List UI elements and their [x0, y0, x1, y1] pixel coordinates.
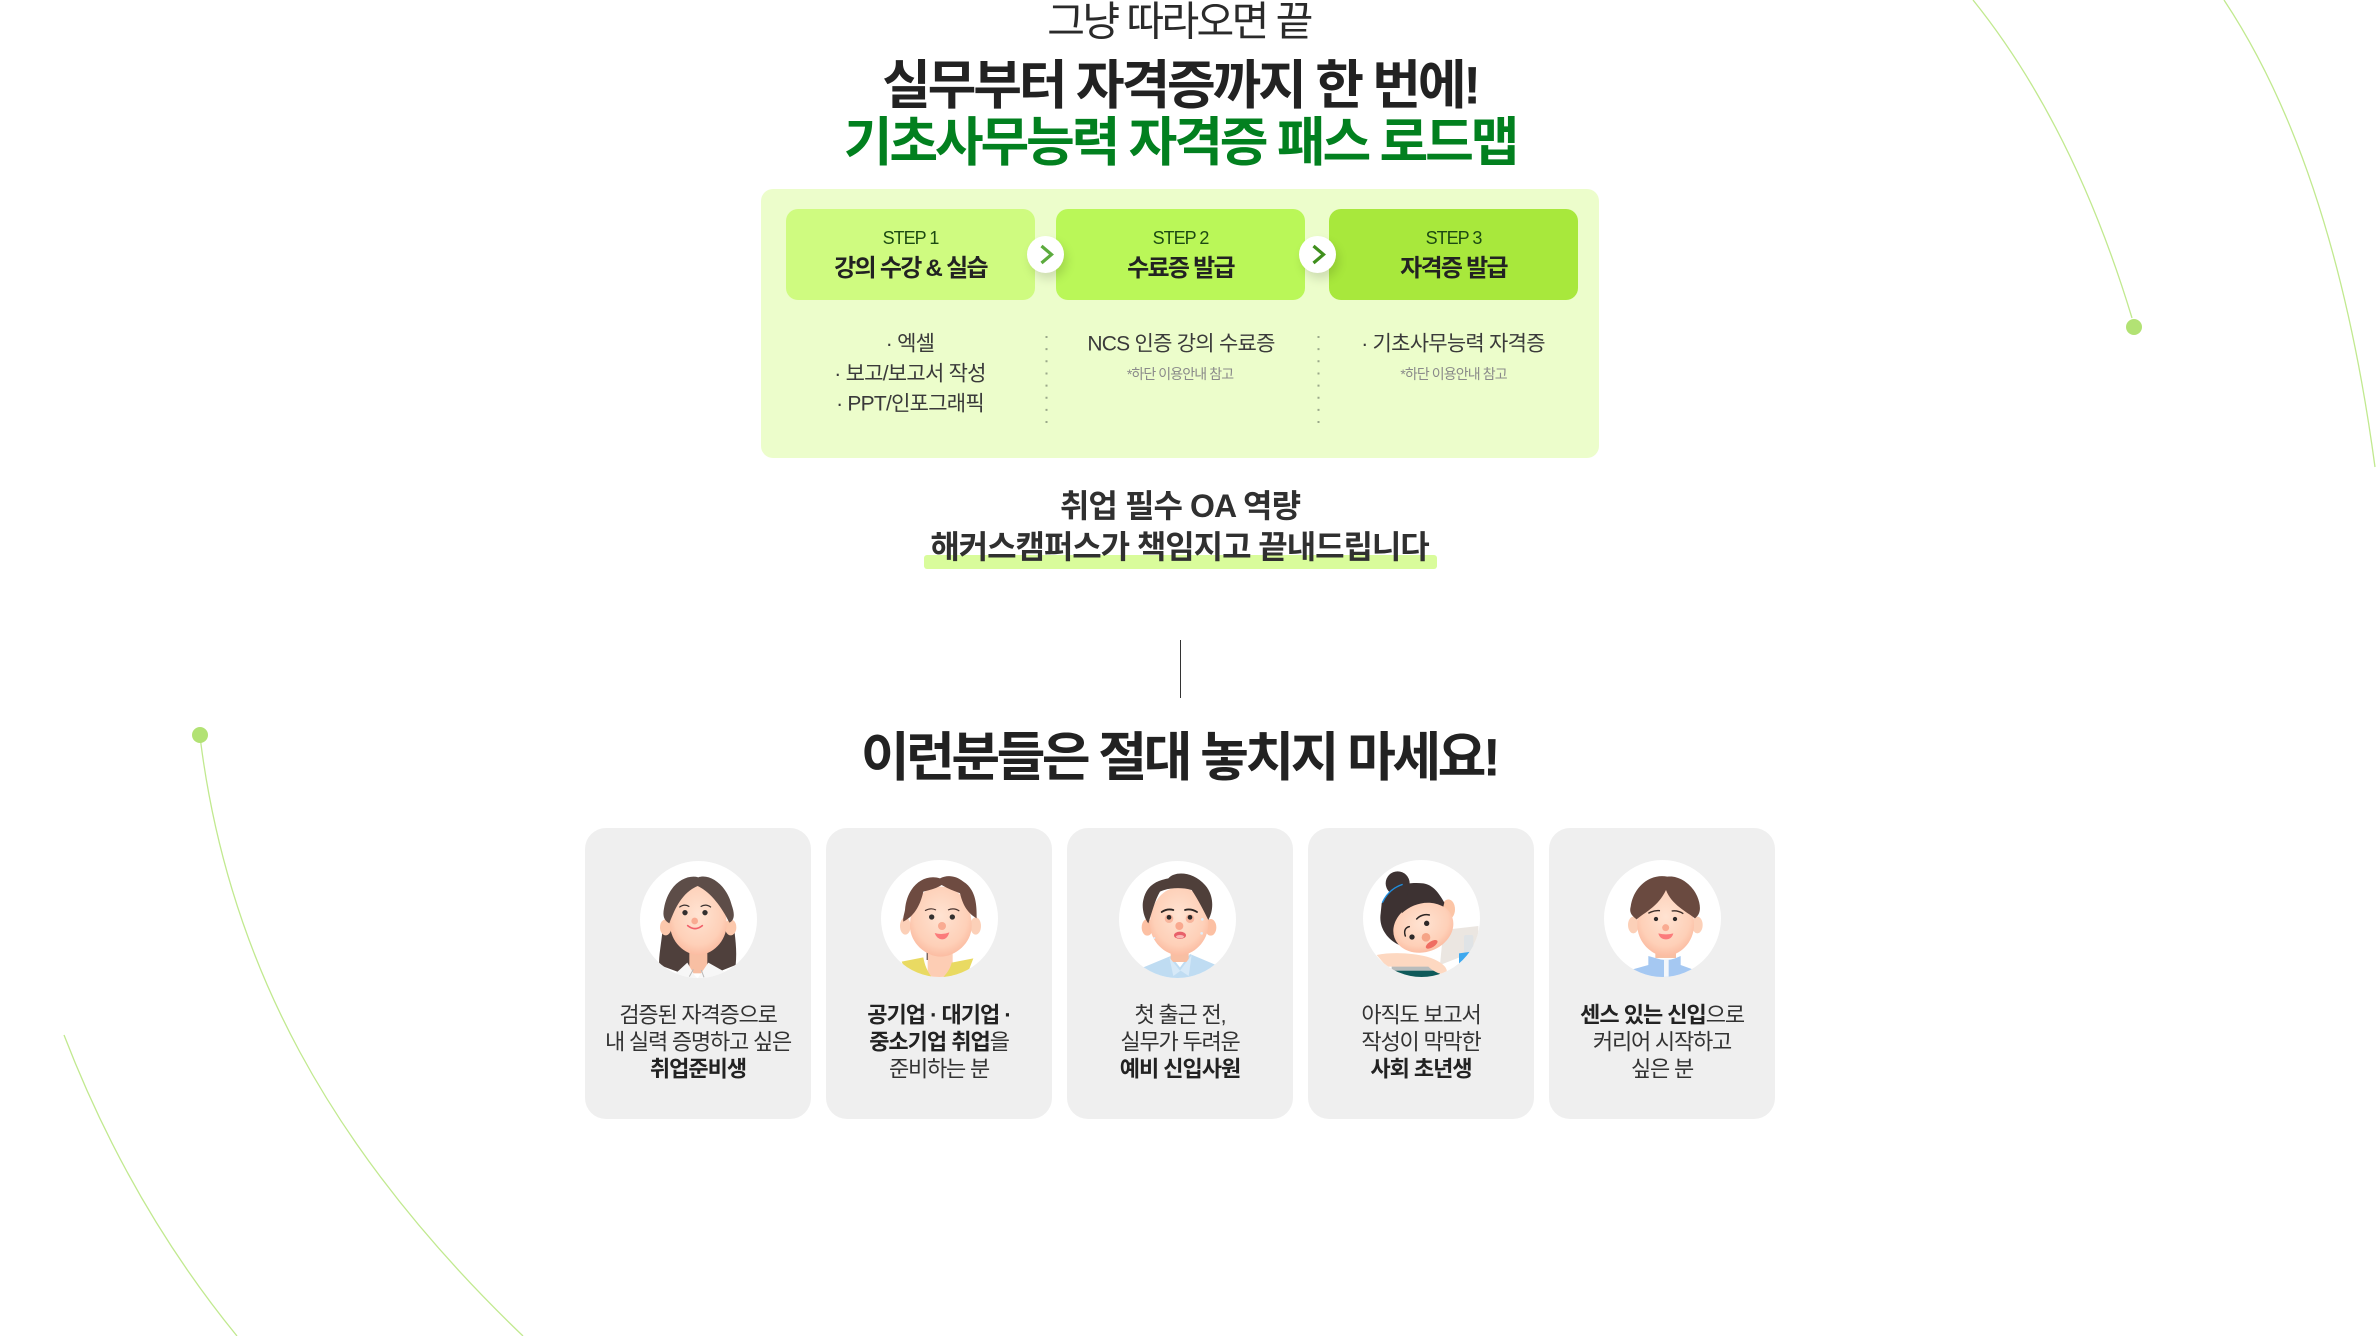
step 1 label: STEP 1 — [883, 228, 938, 248]
step 1 title: 강의 수강 & 실습 — [834, 255, 987, 282]
card 2 text: 준비하는 분 — [889, 1056, 989, 1081]
highlight bar — [924, 555, 1437, 569]
card 2: job applicant — [826, 828, 1052, 1119]
arc: bottom left outer — [64, 1035, 237, 1336]
card 2 text: 공기업 · 대기업 · — [867, 1002, 1011, 1027]
icon: tired woman on desk — [1363, 860, 1480, 977]
step 3 label: STEP 3 — [1426, 228, 1481, 248]
step 2 title: 수료증 발급 — [1127, 255, 1234, 282]
arc: top right outer — [2224, 0, 2375, 467]
arc: top right inner with dot — [1973, 0, 2142, 335]
card 1 text: 내 실력 증명하고 싶은 — [605, 1029, 791, 1054]
card 3 text: 첫 출근 전, — [1135, 1002, 1225, 1027]
icon: woman with long hair — [640, 861, 757, 978]
subheading line 2: 해커스캠퍼스가 책임지고 끝내드립니다 — [930, 529, 1429, 565]
icon: person in yellow hoodie — [881, 860, 998, 977]
icon: young man in blue jacket — [1604, 860, 1721, 977]
subheading line 1: 취업 필수 OA 역량 — [1060, 488, 1300, 524]
main title line: 실무부터 자격증까지 한 번에! — [882, 56, 1478, 115]
panel: roadmap — [761, 189, 1599, 458]
card 5 text: 싶은 분 — [1631, 1056, 1693, 1081]
icon: worried man in blue shirt — [1119, 861, 1236, 978]
card 5 text: 센스 있는 신입으로 — [1580, 1002, 1744, 1027]
card 4 text — [1361, 1002, 1481, 1081]
card 1 text — [605, 1002, 792, 1081]
arrow: step 2 to step 3 — [1299, 236, 1336, 273]
card 4: junior employee — [1308, 828, 1534, 1119]
step 3 title: 자격증 발급 — [1400, 255, 1507, 282]
card 1: job seeker — [585, 828, 811, 1119]
card 5: sensible newcomer — [1549, 828, 1775, 1119]
list item: · 보고/보고서 작성 — [834, 362, 986, 385]
list item: · 엑셀 — [886, 332, 934, 355]
card 4 text: 작성이 막막한 — [1361, 1029, 1481, 1054]
card 3 text: 실무가 두려운 — [1120, 1029, 1240, 1054]
step 3 contents: · 기초사무능력 자격증 — [1361, 332, 1545, 355]
green title line: 기초사무능력 자격증 패스 로드맵 — [844, 113, 1516, 172]
card 2 text — [867, 1002, 1011, 1081]
step 3 note: *하단 이용안내 참고 — [1400, 366, 1507, 382]
card 3: new hire — [1067, 828, 1293, 1119]
step 2 note: *하단 이용안내 참고 — [1127, 366, 1233, 382]
card 1 text: 취업준비생 — [650, 1056, 746, 1081]
step 2 box — [1056, 209, 1305, 300]
card 4 text: 아직도 보고서 — [1361, 1002, 1481, 1027]
card 3 text — [1120, 1002, 1240, 1081]
step 1 box — [786, 209, 1035, 300]
card 5 text — [1580, 1002, 1744, 1081]
arc: bottom left inner with dot — [192, 727, 523, 1336]
card 4 text: 사회 초년생 — [1370, 1056, 1472, 1081]
card 2 text: 중소기업 취업을 — [869, 1029, 1009, 1054]
card 1 text: 검증된 자격증으로 — [619, 1002, 777, 1027]
arrow: step 1 to step 2 — [1027, 236, 1064, 273]
step 3 box — [1329, 209, 1578, 300]
card 5 text: 커리어 시작하고 — [1593, 1029, 1731, 1054]
step 2 contents: NCS 인증 강의 수료증 — [1087, 332, 1275, 355]
list: step 1 contents — [834, 332, 986, 415]
section heading: 이런분들은 절대 놓치지 마세요! — [861, 728, 1497, 788]
list item: · PPT/인포그래픽 — [836, 392, 984, 415]
step 2 label: STEP 2 — [1153, 228, 1208, 248]
card 3 text: 예비 신입사원 — [1120, 1056, 1240, 1081]
